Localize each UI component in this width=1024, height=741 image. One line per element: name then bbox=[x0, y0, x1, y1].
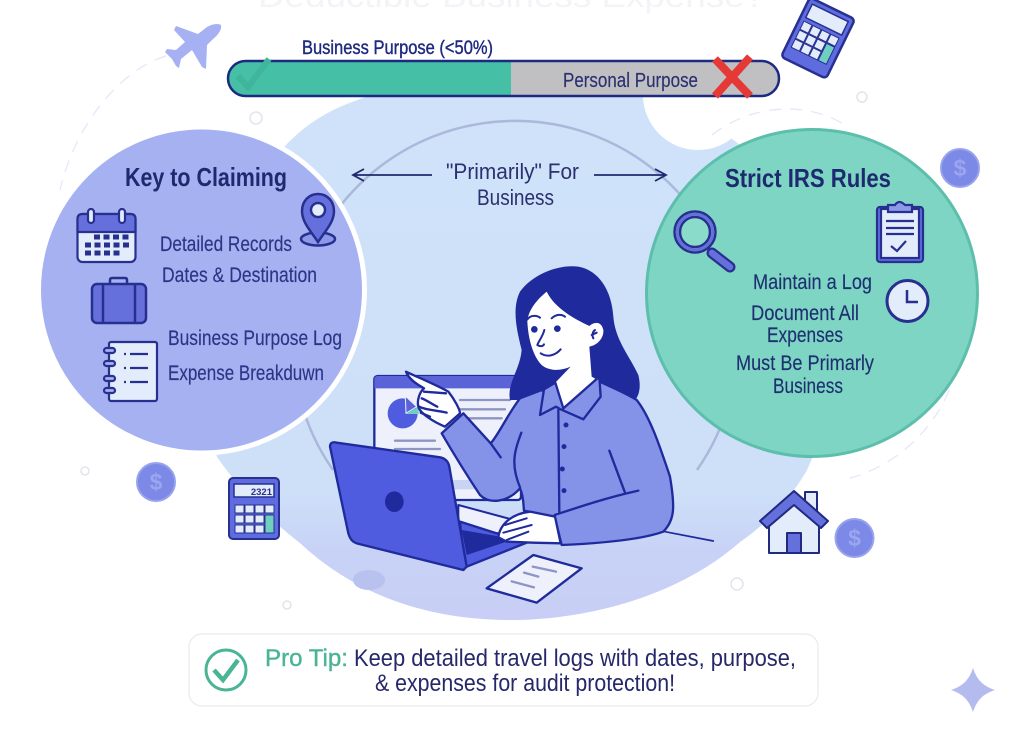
white notch bbox=[643, 40, 753, 150]
hair bbox=[509, 266, 640, 400]
small dots bbox=[81, 92, 867, 609]
shirt bbox=[442, 382, 673, 545]
item texts: Expenses bbox=[767, 324, 843, 347]
desk line bbox=[665, 532, 713, 541]
heading: Strict IRS Rules bbox=[725, 163, 891, 193]
pro tip callout bbox=[189, 634, 818, 706]
table shadow bbox=[353, 570, 385, 590]
panel disc bbox=[38, 127, 364, 453]
center caption: Business bbox=[477, 185, 554, 210]
bar label personal: Personal Purpose bbox=[563, 70, 698, 92]
panel disc bbox=[646, 130, 978, 456]
item texts: Business bbox=[773, 375, 843, 398]
laptop lid bbox=[330, 442, 467, 570]
dashed orbit left bbox=[60, 56, 166, 190]
icon: check circle bbox=[206, 650, 246, 690]
icon: dollar coin right bbox=[941, 149, 979, 187]
resting hand bbox=[498, 512, 561, 543]
item texts: Must Be Primarly bbox=[736, 352, 874, 375]
icon: house bbox=[760, 491, 828, 553]
arrow right bbox=[594, 169, 666, 181]
icon: airplane bbox=[165, 24, 221, 69]
icon: calculator bbox=[229, 478, 279, 539]
icon: check bbox=[238, 59, 269, 87]
face details bbox=[527, 315, 597, 356]
bar outline bbox=[228, 61, 779, 96]
face and neck bbox=[527, 292, 603, 409]
pointing hand bbox=[406, 372, 460, 427]
shirt details bbox=[491, 410, 638, 515]
ring arc bbox=[293, 121, 737, 470]
icon: clock bbox=[887, 280, 928, 322]
heading: Key to Claiming bbox=[125, 162, 287, 192]
dashed orbit right bbox=[712, 109, 955, 478]
hand fingers bbox=[503, 518, 532, 540]
callout box bbox=[189, 634, 818, 706]
pro tip callout: & expenses for audit protection! bbox=[375, 670, 675, 697]
bar business segment bbox=[228, 61, 511, 96]
icon: notebook bbox=[104, 342, 157, 401]
progress bar bbox=[228, 38, 779, 96]
bar track bbox=[228, 61, 779, 96]
icon: dollar coin left: $ bbox=[150, 469, 163, 495]
icon: calculator: 2321 bbox=[251, 487, 273, 498]
collar bbox=[540, 377, 601, 419]
keyboard bbox=[462, 530, 507, 555]
item texts bbox=[160, 233, 342, 385]
icon: red cross bbox=[715, 57, 750, 96]
icon: dollar coin bottom: $ bbox=[848, 525, 861, 551]
panel: strict irs rules bbox=[646, 130, 978, 456]
pro tip callout: Keep detailed travel logs with dates, purpose, bbox=[354, 645, 796, 672]
icon: magnifier bbox=[674, 212, 730, 267]
item texts: Dates & Destination bbox=[162, 264, 317, 287]
tip text: Pro Tip: bbox=[265, 645, 348, 672]
bar label business: Business Purpose (<50%) bbox=[302, 38, 493, 59]
item texts: Maintain a Log bbox=[753, 271, 872, 294]
icon: clipboard bbox=[877, 202, 923, 262]
item texts: Business Purpose Log bbox=[168, 327, 342, 350]
icon: dollar coin left bbox=[137, 463, 175, 501]
item texts: Detailed Records bbox=[160, 233, 292, 256]
paper lines bbox=[512, 567, 556, 587]
center caption bbox=[353, 159, 666, 210]
arrow left bbox=[353, 169, 432, 181]
icon: map pin bbox=[301, 194, 335, 246]
icon: calendar bbox=[78, 209, 136, 262]
icon: dollar coin right: $ bbox=[954, 155, 967, 181]
item texts bbox=[736, 271, 874, 398]
panel: key to claiming bbox=[38, 127, 364, 453]
paper bbox=[487, 555, 582, 603]
fingers bbox=[419, 392, 447, 417]
icon: calculator tilted bbox=[781, 0, 855, 79]
laptop base bbox=[460, 522, 533, 568]
laptop logo bbox=[385, 491, 404, 512]
illustration: woman at laptop bbox=[330, 266, 713, 603]
icon: dollar coin bottom bbox=[836, 519, 874, 557]
monitor bbox=[374, 376, 521, 533]
caption text: "Primarily" For bbox=[446, 159, 579, 184]
icon: sparkle bbox=[951, 668, 995, 712]
item texts: Expense Breakduwn bbox=[168, 362, 324, 385]
item texts: Document All bbox=[751, 302, 859, 325]
background blob bbox=[204, 88, 836, 620]
icon: suitcase bbox=[92, 278, 146, 323]
